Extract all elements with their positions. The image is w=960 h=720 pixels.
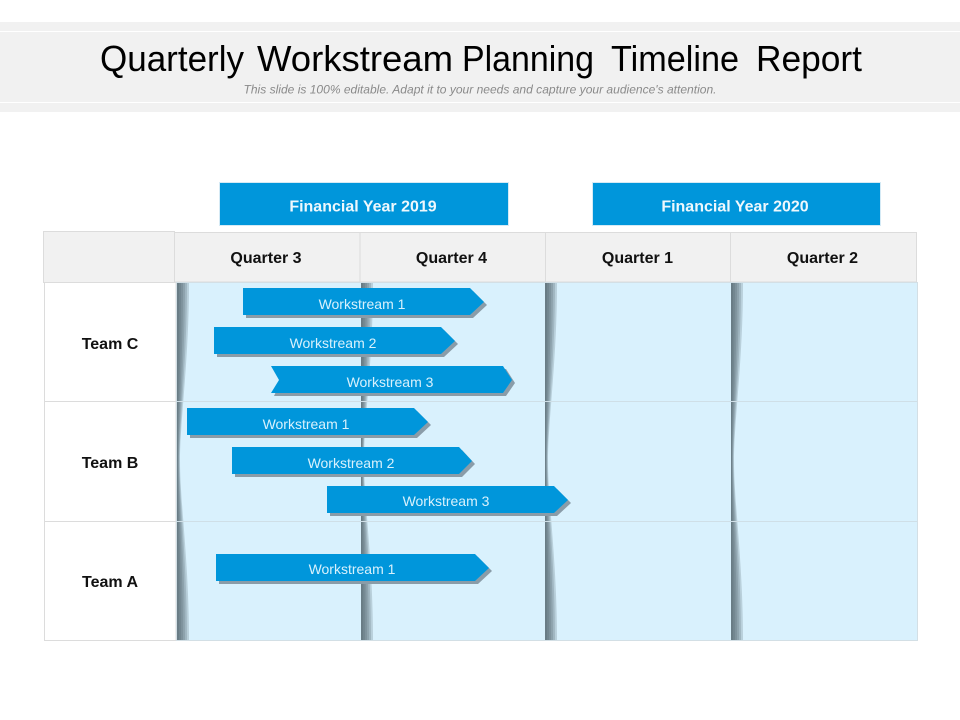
title: Quarterly — [100, 38, 244, 79]
team label column: Team A — [82, 574, 138, 591]
header: Financial Year 2020 — [592, 182, 880, 226]
quarter header row: Quarter 3 — [230, 250, 302, 267]
header: Financial Year 2019: Financial Year 2019 — [289, 198, 437, 216]
subtitle: This slide is 100% editable. Adapt it to your needs and capture your audience's attention. — [244, 82, 716, 96]
bar: Team B Workstream 1: Workstream 1 — [263, 416, 350, 432]
team label column — [44, 282, 176, 640]
bar: Team C Workstream 3: Workstream 3 — [347, 374, 434, 390]
title band — [0, 22, 960, 112]
timeline grid — [176, 282, 918, 640]
team label column: Team C — [82, 336, 139, 353]
bar: Team C Workstream 3 — [271, 366, 515, 396]
bar: Team C Workstream 1 — [243, 288, 487, 318]
bar: Team C Workstream 1: Workstream 1 — [319, 296, 406, 312]
bar: Team B Workstream 3 — [327, 486, 571, 516]
title — [100, 38, 862, 79]
header: Financial Year 2019 — [220, 182, 508, 226]
bar: Team B Workstream 1 — [187, 408, 431, 438]
bar: Team A Workstream 1: Workstream 1 — [309, 561, 396, 577]
bar: Team B Workstream 2 — [232, 447, 475, 477]
title: Report — [756, 38, 862, 79]
bar: Team C Workstream 2: Workstream 2 — [290, 335, 377, 351]
team label column: Team B — [82, 455, 138, 472]
quarter header row: Quarter 2 — [787, 250, 858, 267]
bar: Team C Workstream 2 — [214, 327, 458, 357]
bar: Team B Workstream 2: Workstream 2 — [308, 455, 395, 471]
title: Workstream — [257, 38, 453, 79]
bar: Team A Workstream 1 — [216, 554, 492, 584]
header: Financial Year 2020: Financial Year 2020 — [661, 198, 809, 216]
quarter header row — [44, 232, 916, 282]
bar: Team B Workstream 3: Workstream 3 — [403, 493, 490, 509]
title: Timeline — [611, 38, 739, 79]
quarter header row: Quarter 1 — [602, 250, 673, 267]
quarter header row: Quarter 4 — [416, 250, 487, 267]
title: Planning — [462, 38, 594, 79]
